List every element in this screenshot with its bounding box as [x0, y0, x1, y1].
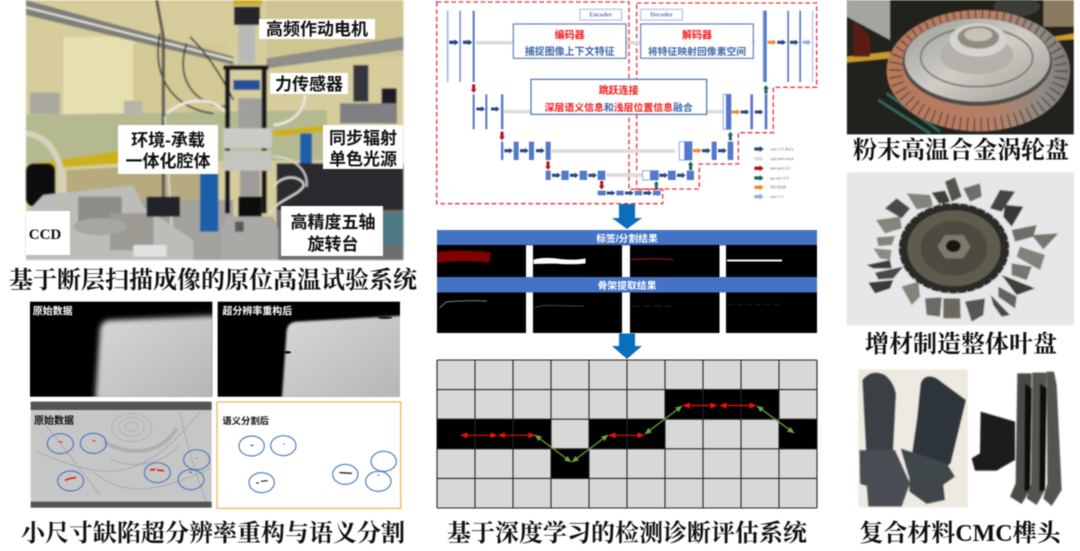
- skip connection arrows: [476, 43, 755, 175]
- label: rotary stage: 旋转台: [308, 234, 358, 254]
- encoder callout: [513, 24, 626, 58]
- label: integrated chamber: [118, 125, 218, 174]
- image: CMC dovetail parts: [858, 369, 1062, 507]
- SE/CBAM arrows: [693, 40, 776, 190]
- decoder dashed outline: [637, 3, 817, 189]
- green diagonal arrows: [535, 406, 794, 462]
- encoder tag: [580, 9, 622, 20]
- defect circles: [47, 433, 210, 491]
- network bars: [447, 11, 813, 195]
- copy legend arrow: [754, 156, 764, 162]
- heading: turbine disc: 粉末高温合金涡轮盘: [853, 136, 1069, 164]
- label: synchrotron source: [323, 125, 403, 169]
- diagram: U-Net network: [437, 2, 817, 204]
- legend text: copy and concat: [770, 157, 794, 161]
- image: raw data: 原始数据: [33, 304, 73, 317]
- heading: super-resolution and segmentation: 小尺寸缺陷超分辨率重构与语义分割: [21, 520, 405, 547]
- label: CCD: [26, 211, 70, 255]
- legend text: conv 3×3, ReLu: [770, 147, 794, 152]
- label: force sensor: 力传感器: [275, 74, 343, 94]
- arrow: network to results: [612, 204, 642, 229]
- image: semantic segmentation result: 语义分割后: [222, 415, 270, 426]
- segmentation result images: [437, 245, 817, 277]
- conv 1x1 arrows: [754, 40, 811, 200]
- label: CCD: CCD: [29, 227, 61, 243]
- chart: skeleton grid evaluation: [437, 360, 817, 508]
- decoder tag: [641, 9, 682, 20]
- band: skeleton label: [437, 277, 817, 292]
- encoder callout: 捕捉图像上下文特征: [525, 45, 615, 58]
- skeleton result images: [437, 292, 817, 333]
- max pool arrows: [471, 84, 764, 190]
- label: synchrotron source: 同步辐射: [329, 128, 397, 148]
- heading: CMC dovetail: 复合材料CMC榫头: [859, 520, 1063, 547]
- label: rotary stage: 高精度五轴: [290, 212, 376, 232]
- label: integrated chamber: 一体化腔体: [126, 151, 210, 171]
- label: high frequency actuator: 高频作动电机: [266, 19, 368, 39]
- arrow: results to grid: [612, 334, 642, 359]
- decoder callout: [641, 24, 753, 58]
- panel: super-resolution and segmentation images: [30, 302, 403, 508]
- image: powder superalloy turbine disc: [847, 0, 1074, 135]
- band: segmentation label: [437, 230, 817, 246]
- skip connection callout: [531, 79, 707, 114]
- image: raw data: [30, 302, 217, 402]
- legend text: [770, 147, 794, 199]
- panel: in-situ high temperature test system photo: [26, 0, 403, 260]
- band: segmentation label: 标签/分割结果: [596, 232, 658, 245]
- defect marks: [59, 440, 197, 480]
- encoder callout: 编码器: [555, 28, 585, 41]
- image: semantic segmentation result: [217, 402, 401, 508]
- label: integrated chamber: 环境-承载: [131, 130, 205, 150]
- decoder callout: 将特征映射回像素空间: [648, 45, 746, 58]
- heading: deep learning system: 基于深度学习的检测诊断评估系统: [447, 519, 809, 547]
- blade fragments: [867, 177, 1058, 322]
- up-conv arrows: [654, 85, 769, 189]
- legend text: max pool 2×2: [770, 167, 791, 171]
- skip connection callout: 跳跃连接: [599, 84, 639, 97]
- red horizontal arrows: [461, 406, 756, 435]
- image: super-resolution result: 超分辨率重构后: [222, 304, 292, 317]
- legend text: conv 1×1: [770, 195, 784, 199]
- panel: segmentation and skeleton results: [437, 230, 817, 333]
- legend text: SE/CBAM: [770, 186, 787, 190]
- heading: in-situ test system: 基于断层扫描成像的原位高温试验系统: [9, 266, 419, 294]
- label: rotary stage: [281, 206, 383, 256]
- conv arrows: [449, 39, 799, 196]
- skip connection callout: 深层语义信息和浅层位置信息融合: [545, 101, 693, 114]
- image: raw data with defects: 原始数据: [34, 414, 74, 427]
- band: skeleton label: 骨架提取结果: [598, 279, 657, 292]
- image: additive manufactured blisk: [847, 172, 1074, 325]
- label: synchrotron source: 单色光源: [329, 149, 397, 169]
- decoder callout: 解码器: [682, 28, 712, 41]
- image: raw data with defects: [31, 402, 212, 508]
- decoder tag: Decoder: [650, 12, 673, 19]
- encoder dashed outline: [437, 2, 663, 204]
- encoder tag: Encoder: [589, 12, 612, 19]
- heading: blisk: 增材制造整体叶盘: [865, 330, 1057, 358]
- black skeleton cells: [437, 390, 817, 478]
- image: super-resolution result: [218, 302, 403, 402]
- legend text: up-conv 2×2: [770, 176, 789, 180]
